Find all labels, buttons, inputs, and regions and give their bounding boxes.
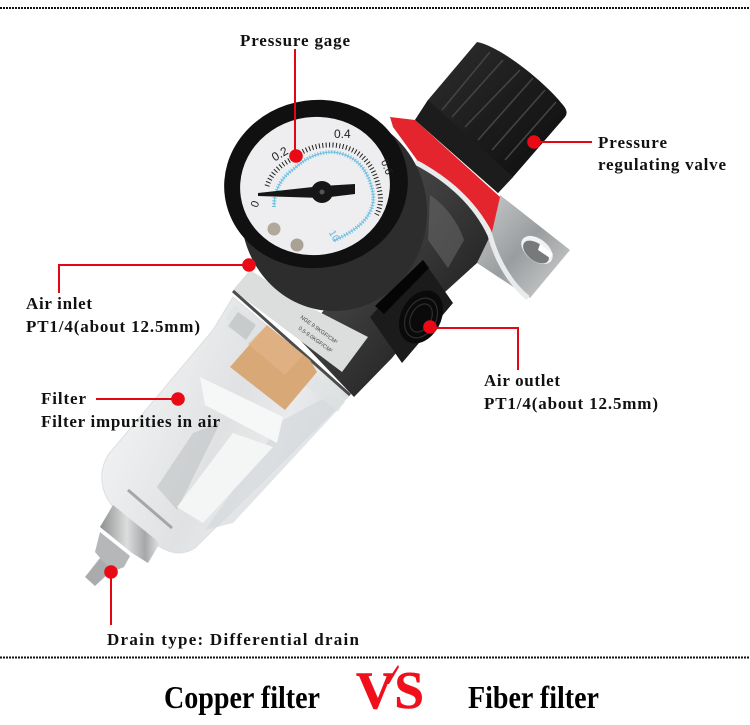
top dashed divider: [0, 7, 750, 9]
callout: air outlet: PT1/4(about 12.5mm): [484, 394, 658, 413]
callout: filter: Filter impurities in air: [41, 412, 220, 431]
icon: silver label band: NGE 9.9KGF/CM²: [299, 315, 338, 346]
icon: drain fitting: [85, 505, 160, 586]
gauge scale numbers: 10: [326, 229, 341, 244]
icon: bracket steel strip: [415, 162, 528, 298]
comparison heading: copper filter vs fiber filter: Fiber filter: [468, 679, 599, 715]
callout: air inlet: PT1/4(about 12.5mm): [26, 317, 200, 336]
callout: drain type: Drain type: Differential drain: [107, 630, 360, 649]
callout: air outlet: [423, 320, 658, 413]
icon: silver label band: [233, 270, 368, 372]
bottom dashed divider: [0, 656, 750, 658]
icon: gauge housing: [241, 113, 427, 311]
comparison heading: copper filter vs fiber filter: Copper filter: [164, 679, 320, 715]
icon: outlet port block: [370, 260, 453, 363]
gauge scale numbers: [249, 127, 395, 244]
gauge needle: [258, 184, 355, 198]
product illustration: air filter regulator: [85, 42, 570, 586]
callout: pressure regulating valve: [527, 133, 726, 174]
gauge black tick scale: [267, 145, 380, 216]
gauge face screws: [268, 222, 280, 236]
icon: silver label band: 0.5-9.0KGF/CM²: [297, 326, 333, 354]
icon: pressure gauge: [213, 88, 419, 280]
icon: transparent filter bowl: [102, 291, 350, 553]
icon: copper filter element: [230, 325, 317, 410]
callout: pressure gage: [240, 31, 350, 163]
icon: red collar: [390, 117, 500, 232]
gauge scale numbers: 0.6: [378, 158, 395, 177]
gauge blue tick scale: [274, 152, 373, 241]
callout: filter: Filter: [41, 389, 86, 408]
icon: adjustment knob: [415, 42, 567, 193]
callout: air outlet: Air outlet: [484, 371, 560, 390]
comparison heading: copper filter vs fiber filter: [164, 662, 599, 720]
white baffle plate: [200, 377, 283, 443]
callout: air inlet: [26, 258, 256, 336]
callout: air inlet: Air inlet: [26, 294, 92, 313]
gauge scale numbers: 0: [249, 199, 262, 209]
icon: mounting bracket: [477, 195, 570, 298]
callout: filter: [41, 389, 220, 431]
icon: regulator body: [300, 160, 490, 397]
callout: pressure regulating valve: regulating valve: [598, 155, 726, 174]
callout: pressure regulating valve: Pressure: [598, 133, 667, 152]
gauge scale numbers: 0.2: [269, 144, 291, 164]
VS emblem: VS: [356, 662, 424, 720]
gauge scale numbers: 0.4: [334, 127, 351, 141]
callout: pressure gage: Pressure gage: [240, 31, 350, 50]
callout: drain type: [104, 565, 360, 649]
